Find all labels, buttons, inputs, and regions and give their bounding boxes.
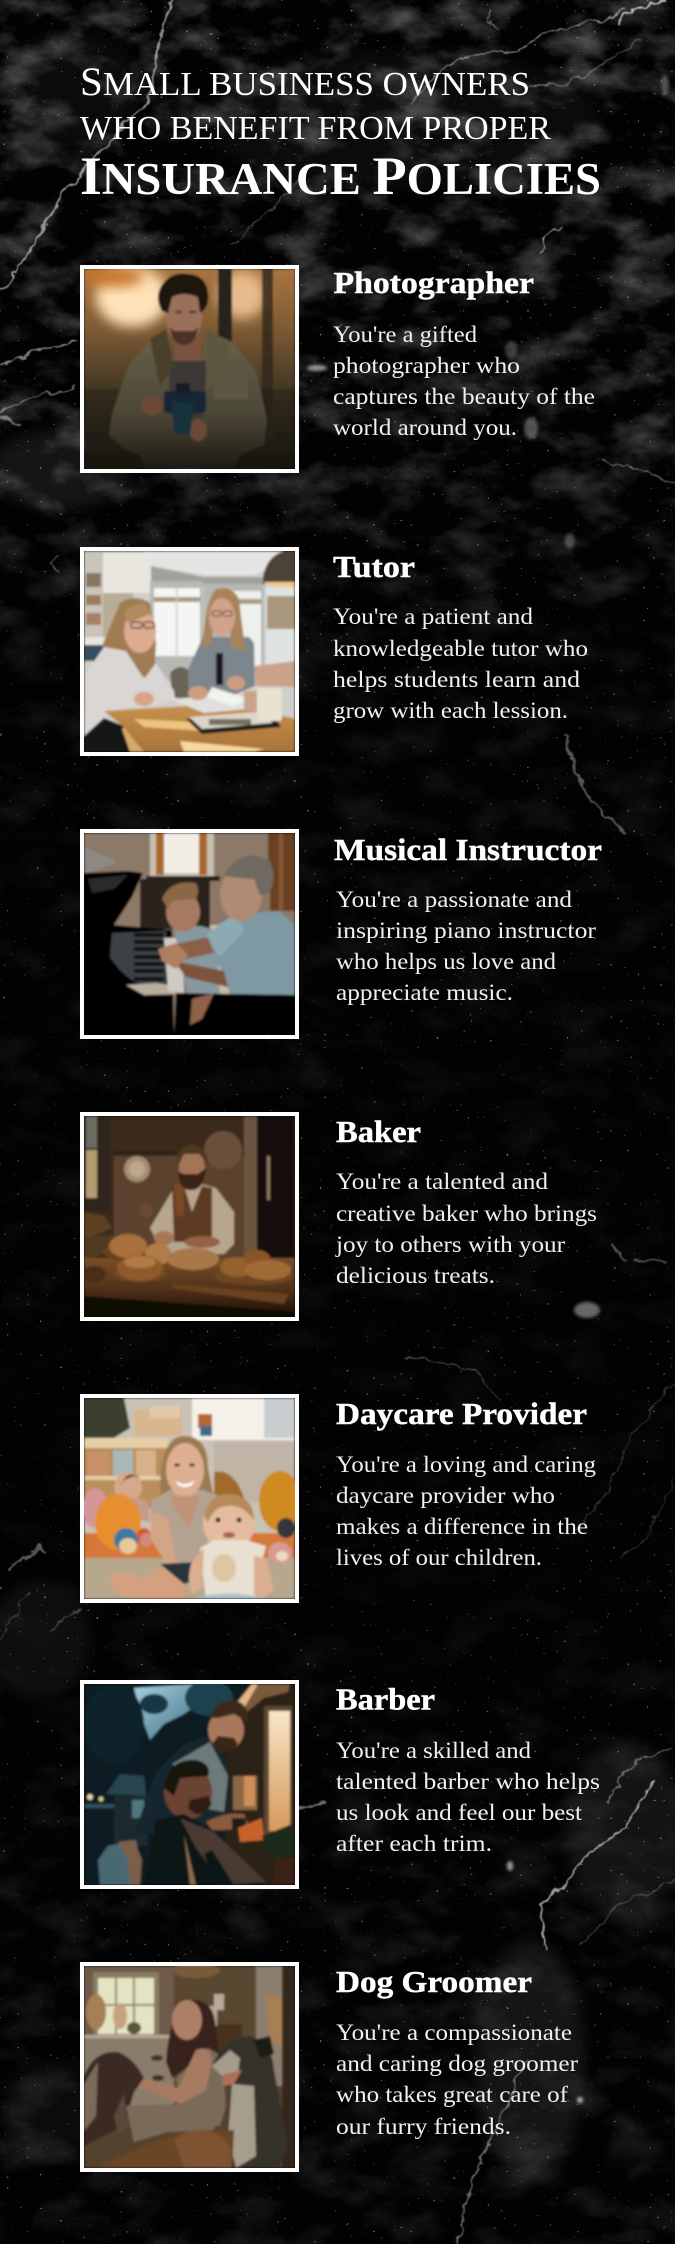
description: and caring dog groomer	[336, 2051, 578, 2076]
photo: photographer in a forest	[84, 269, 295, 469]
description: after each trim.	[336, 1831, 492, 1856]
description: talented barber who helps	[336, 1769, 600, 1794]
description: appreciate music.	[336, 980, 513, 1005]
heading: Dog Groomer	[336, 1964, 532, 1999]
photo: piano teacher with a boy	[84, 833, 295, 1035]
description: makes a difference in the	[336, 1514, 588, 1539]
heading: Musical Instructor	[334, 832, 602, 867]
description: us look and feel our best	[336, 1800, 583, 1825]
description: joy to others with your	[335, 1232, 565, 1257]
photo: barber trimming a client's hair outdoors	[84, 1684, 295, 1885]
description: lives of our children.	[336, 1545, 542, 1570]
heading: Tutor	[333, 549, 415, 584]
title	[80, 59, 601, 206]
photo frame	[82, 1114, 297, 1319]
photo frame	[82, 267, 297, 471]
heading: Barber	[336, 1682, 435, 1716]
description: You're a loving and caring	[336, 1452, 597, 1477]
panel: musical instructor	[82, 831, 602, 1037]
panel: daycare provider	[82, 1396, 597, 1601]
description: You're a gifted	[333, 322, 478, 347]
description	[336, 887, 596, 1005]
photo frame	[82, 1682, 297, 1887]
description	[333, 604, 588, 723]
title line 1: SMALL BUSINESS OWNERS	[80, 59, 530, 104]
panel: dog groomer	[82, 1962, 578, 2170]
description: captures the beauty of the	[333, 384, 595, 409]
panel: photographer	[82, 265, 595, 471]
panel: tutor	[82, 549, 588, 754]
photo frame	[82, 1964, 297, 2170]
description	[336, 1452, 597, 1570]
description: inspiring piano instructor	[336, 918, 596, 943]
title line 3: INSURANCE POLICIES	[80, 146, 601, 206]
description: who helps us love and	[336, 949, 557, 974]
description: grow with each lession.	[333, 698, 568, 723]
panel: barber	[82, 1680, 600, 1887]
description: knowledgeable tutor who	[333, 636, 588, 661]
photo: baker with loaves of bread	[84, 1116, 295, 1317]
photo: dog groomer with two dogs	[84, 1966, 295, 2168]
panel: baker	[82, 1114, 597, 1319]
description: You're a talented and	[336, 1169, 549, 1194]
description	[336, 1738, 600, 1856]
description: photographer who	[333, 353, 520, 378]
description	[336, 2020, 578, 2139]
photo frame	[82, 549, 297, 754]
title line 2: WHO BENEFIT FROM PROPER	[80, 110, 551, 147]
description: creative baker who brings	[336, 1201, 597, 1226]
description: world around you.	[333, 415, 517, 440]
photo frame	[82, 1396, 297, 1601]
description: You're a skilled and	[336, 1738, 532, 1763]
heading: Baker	[336, 1114, 421, 1149]
photo: tutor and student at a table	[84, 551, 295, 752]
heading: Daycare Provider	[336, 1396, 587, 1431]
description: daycare provider who	[336, 1483, 555, 1508]
heading: Photographer	[334, 265, 534, 300]
photo frame	[82, 831, 297, 1037]
description: who takes great care of	[336, 2082, 568, 2107]
description: delicious treats.	[336, 1263, 495, 1288]
description	[335, 1169, 597, 1288]
description: our furry friends.	[336, 2114, 511, 2139]
description	[333, 322, 595, 440]
description: You're a compassionate	[336, 2020, 572, 2045]
description: You're a passionate and	[336, 887, 573, 912]
description: helps students learn and	[333, 667, 581, 692]
photo: daycare provider with children and toys	[84, 1398, 295, 1599]
description: You're a patient and	[333, 604, 534, 629]
